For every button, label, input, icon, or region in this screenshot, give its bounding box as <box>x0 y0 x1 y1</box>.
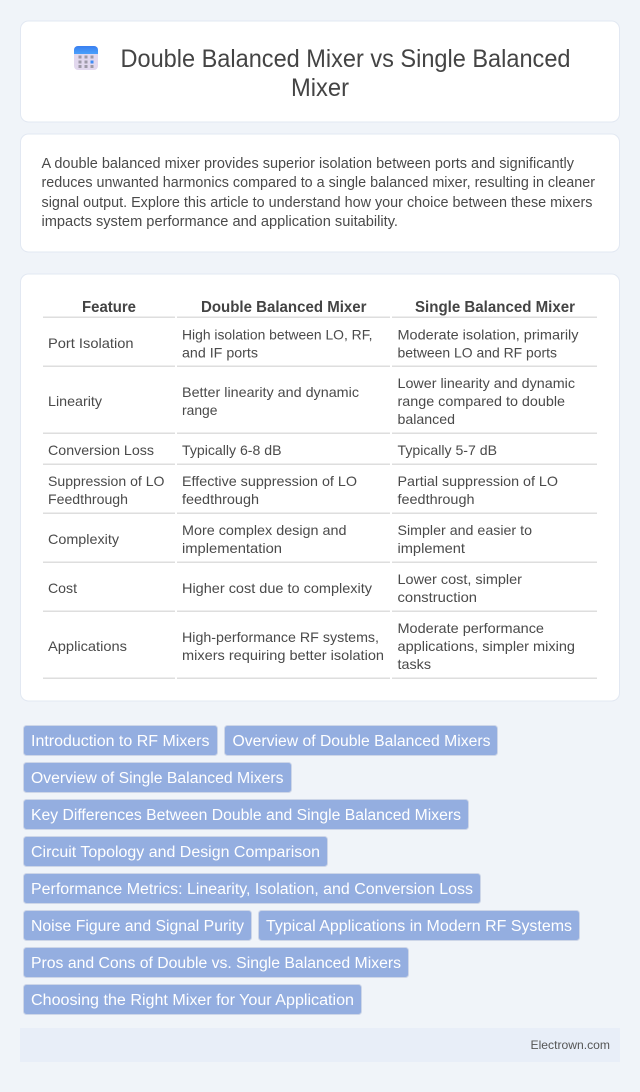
tag: Performance Metrics: Performance Metrics: Linearity, Isolation, and Conversion Loss <box>31 881 473 898</box>
row: linearity: range compared to double <box>398 393 565 409</box>
tag: Performance Metrics <box>24 874 480 904</box>
tag: Circuit Topology <box>24 836 328 866</box>
row: complexity: implementation <box>182 540 282 556</box>
table header row: Double Balanced Mixer <box>201 299 366 316</box>
intro text: impacts system performance and application suitability. <box>42 214 398 230</box>
row: conversion loss: Conversion Loss <box>48 442 154 458</box>
row: port isolation: between LO and RF ports <box>398 344 557 360</box>
row: complexity: Simpler and easier to <box>398 522 532 538</box>
row: suppression of LO feedthrough: Effective suppression of LO <box>182 473 357 489</box>
table header row <box>82 299 575 316</box>
row: linearity: Better linearity and dynamic <box>182 384 359 400</box>
row: port isolation: and IF ports <box>182 344 258 360</box>
row: suppression of LO feedthrough: Feedthrough <box>48 491 128 507</box>
row: conversion loss: Typically 5-7 dB <box>398 442 497 458</box>
row: port isolation: Port Isolation <box>48 335 134 351</box>
panel: comparison table <box>20 274 620 701</box>
icon: calendar <box>74 46 98 70</box>
tag: Pros and Cons <box>24 948 408 978</box>
row: linearity: range <box>182 402 218 418</box>
row: complexity: Complexity <box>48 531 119 547</box>
tag: Typical Applications: Typical Applications in Modern RF Systems <box>266 918 572 935</box>
tag: Overview of Single Balanced Mixers: Overview of Single Balanced Mixers <box>31 770 284 787</box>
row: applications: Applications <box>48 638 127 654</box>
panel: topic tags <box>24 726 580 1014</box>
panel: introduction <box>20 134 620 252</box>
row: applications: High-performance RF systems, <box>182 629 379 645</box>
tag: Introduction to RF Mixers: Introduction to RF Mixers <box>31 733 210 750</box>
row: applications: mixers requiring better isolation <box>182 647 384 663</box>
row: conversion loss <box>48 442 497 458</box>
intro text: signal output. Explore this article to understand how your choice between these mixers <box>42 195 592 211</box>
row: cost: Lower cost, simpler <box>398 571 522 587</box>
title: Mixer <box>291 74 349 102</box>
row: applications <box>48 620 575 672</box>
row: suppression of LO feedthrough: feedthrough <box>398 491 474 507</box>
row: applications: applications, simpler mixing <box>398 638 575 654</box>
footer: Electrown.com <box>530 1038 610 1052</box>
row: port isolation <box>48 326 578 360</box>
row: linearity: Lower linearity and dynamic <box>398 375 575 391</box>
row: complexity <box>48 522 532 556</box>
row: port isolation: High isolation between LO, RF, <box>182 326 372 342</box>
row: port isolation: Moderate isolation, primarily <box>398 326 578 342</box>
row: linearity: balanced <box>398 411 455 427</box>
row: cost: Higher cost due to complexity <box>182 580 372 596</box>
row: suppression of LO feedthrough: Partial suppression of LO <box>398 473 558 489</box>
tag: Circuit Topology: Circuit Topology and Design Comparison <box>31 844 320 861</box>
row: applications: Moderate performance <box>398 620 544 636</box>
tag: Introduction to RF Mixers <box>24 726 218 756</box>
tag: Noise Figure: Noise Figure and Signal Purity <box>31 918 244 935</box>
tag: Overview of Double Balanced Mixers: Overview of Double Balanced Mixers <box>232 733 491 750</box>
row: complexity: More complex design and <box>182 522 346 538</box>
tag: Choosing the Right Mixer <box>24 984 362 1014</box>
tag: Overview of Double Balanced Mixers <box>224 726 498 756</box>
row: applications: tasks <box>398 656 431 672</box>
row: cost: Cost <box>48 580 77 596</box>
row: suppression of LO feedthrough: Suppression of LO <box>48 473 165 489</box>
intro text: A double balanced mixer provides superior isolation between ports and significantly <box>42 156 575 172</box>
row: complexity: implement <box>398 540 465 556</box>
intro text: reduces unwanted harmonics compared to a single balanced mixer, resulting in cleaner <box>42 175 595 191</box>
title: Double Balanced Mixer vs Single Balanced <box>120 45 570 73</box>
table header row: Feature <box>82 299 136 316</box>
row: suppression of LO feedthrough <box>48 473 558 507</box>
panel: title header <box>20 21 620 122</box>
tag: Noise Figure <box>24 910 252 940</box>
row: linearity <box>48 375 575 427</box>
row: cost <box>48 571 522 605</box>
table header row: Single Balanced Mixer <box>415 299 575 316</box>
row: linearity: Linearity <box>48 393 102 409</box>
intro text <box>42 156 595 230</box>
row: cost: construction <box>398 589 477 605</box>
row: suppression of LO feedthrough: feedthrough <box>182 491 259 507</box>
title <box>120 45 570 102</box>
tag: Choosing the Right Mixer: Choosing the Right Mixer for Your Application <box>31 992 354 1009</box>
tag: Key Differences: Key Differences Between Double and Single Balanced Mixers <box>31 807 461 824</box>
tag: Overview of Single Balanced Mixers <box>24 762 292 792</box>
tag: Key Differences <box>24 800 468 830</box>
tag: Typical Applications <box>258 910 580 940</box>
tag: Pros and Cons: Pros and Cons of Double vs. Single Balanced Mixers <box>31 955 401 972</box>
footer <box>20 1028 620 1062</box>
row: conversion loss: Typically 6-8 dB <box>182 442 282 458</box>
